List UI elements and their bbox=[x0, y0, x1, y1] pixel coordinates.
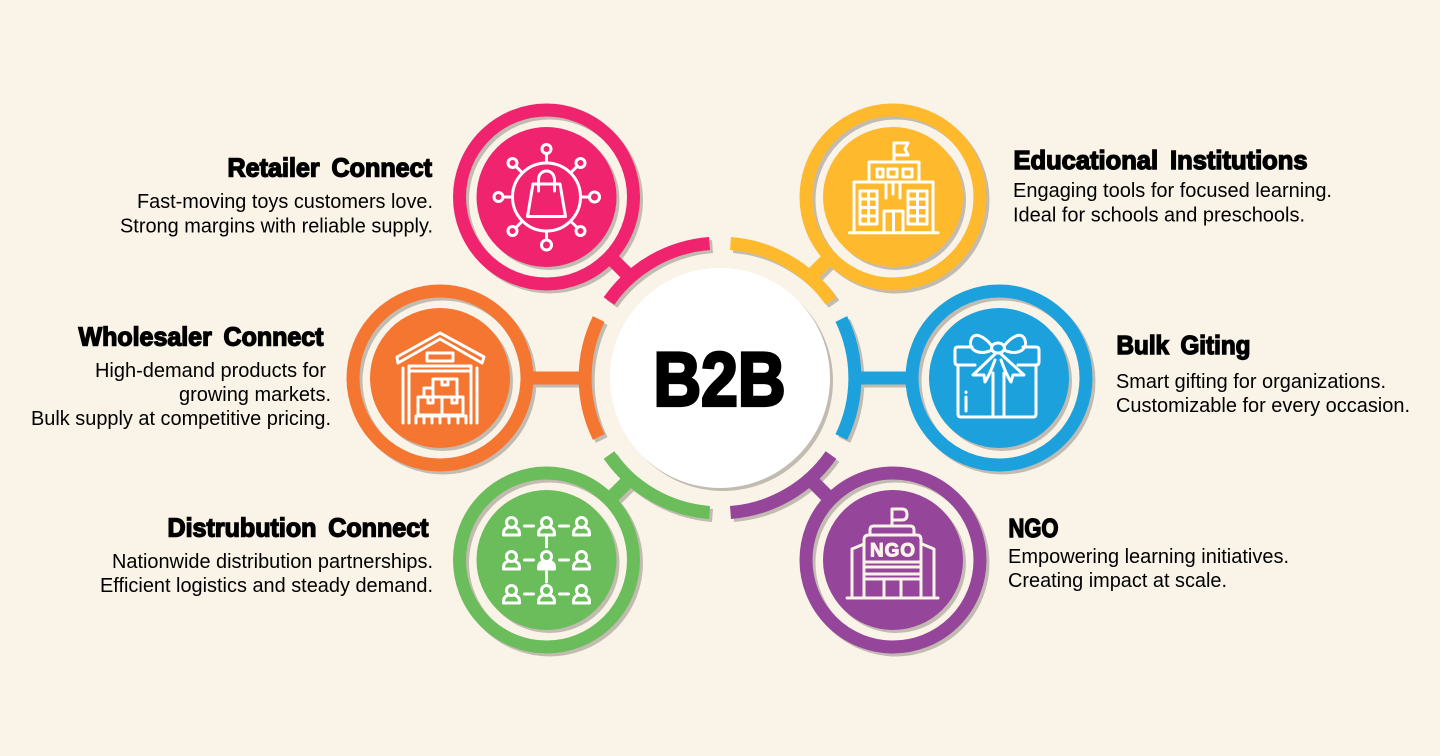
panel: Educational Institutions bbox=[730, 110, 1332, 301]
description: Creating impact at scale. bbox=[1008, 570, 1227, 592]
description bbox=[1008, 546, 1289, 592]
heading: Distrubution Connect bbox=[168, 512, 429, 542]
heading: Bulk Giting bbox=[1116, 330, 1250, 360]
description: Bulk supply at competitive pricing. bbox=[31, 408, 331, 430]
heading: Educational Institutions bbox=[1014, 145, 1308, 175]
description: Strong margins with reliable supply. bbox=[120, 216, 433, 238]
description bbox=[100, 551, 433, 597]
description: Nationwide distribution partnerships. bbox=[112, 551, 433, 573]
green ring, connector and arc bbox=[460, 455, 710, 647]
description bbox=[1116, 371, 1410, 417]
panel: Distrubution Connect bbox=[100, 455, 710, 647]
icon: NGO building bbox=[847, 509, 938, 598]
heading: NGO bbox=[1008, 513, 1058, 543]
description: Ideal for schools and preschools. bbox=[1013, 204, 1305, 226]
center hub: B2B bbox=[610, 268, 830, 488]
purple ring, connector and arc bbox=[730, 455, 980, 647]
description: High-demand products for bbox=[95, 360, 326, 382]
description: Fast-moving toys customers love. bbox=[137, 191, 433, 213]
orange ring, connector and arc bbox=[353, 291, 599, 465]
pink ring, connector and arc bbox=[460, 110, 710, 301]
description: Smart gifting for organizations. bbox=[1116, 371, 1386, 393]
blue ring, connector and arc bbox=[841, 291, 1086, 465]
icon: shopping bag network bbox=[494, 144, 600, 250]
panel: Wholesaler Connect bbox=[31, 291, 599, 465]
icon: people network bbox=[504, 518, 590, 603]
description: Engaging tools for focused learning. bbox=[1013, 180, 1332, 202]
heading: Wholesaler Connect bbox=[78, 322, 324, 352]
panel: NGO bbox=[730, 455, 1289, 647]
description bbox=[1013, 180, 1332, 226]
panel: Retailer Connect bbox=[120, 110, 710, 301]
description bbox=[120, 191, 433, 238]
description: Efficient logistics and steady demand. bbox=[100, 575, 433, 597]
description: growing markets. bbox=[179, 384, 331, 406]
description: Customizable for every occasion. bbox=[1116, 395, 1410, 417]
center hub: B2B: B2B bbox=[654, 338, 786, 422]
yellow ring, connector and arc bbox=[730, 110, 980, 301]
icon: NGO building: NGO bbox=[870, 540, 915, 562]
icon: school building bbox=[850, 143, 938, 233]
icon: warehouse bbox=[397, 333, 484, 423]
description bbox=[31, 360, 331, 430]
icon: gift box bbox=[955, 335, 1039, 417]
heading: Retailer Connect bbox=[228, 152, 432, 182]
panel: Bulk Giting bbox=[841, 291, 1410, 465]
description: Empowering learning initiatives. bbox=[1008, 546, 1289, 568]
